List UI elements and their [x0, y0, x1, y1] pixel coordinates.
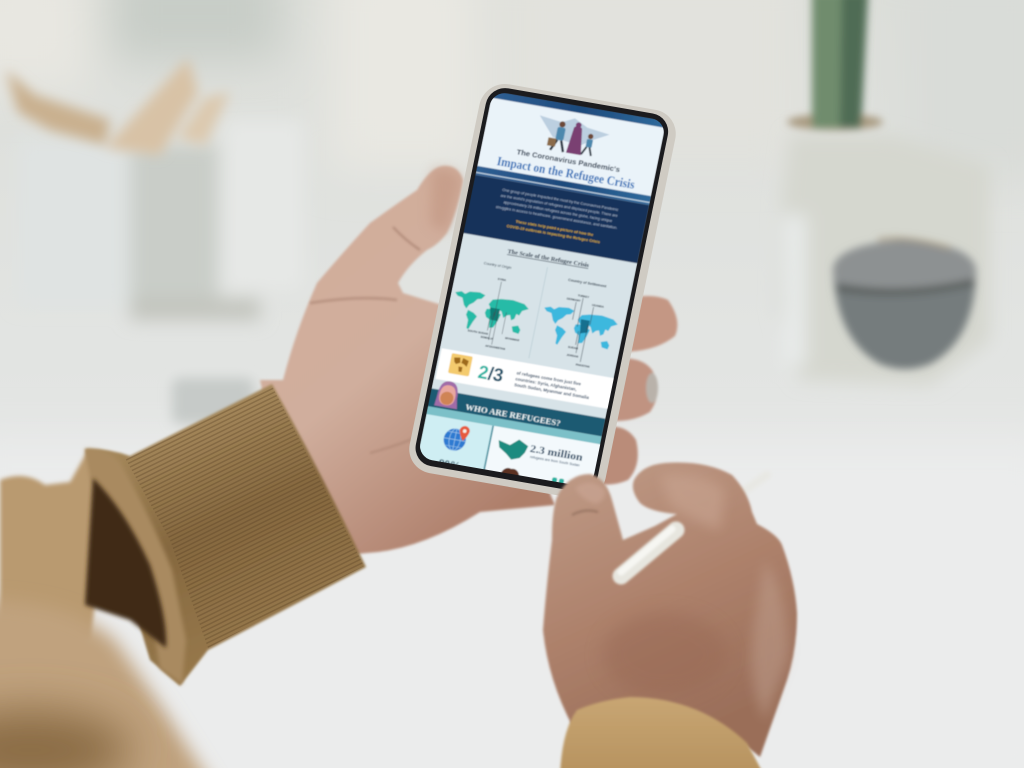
upper sleeve [0, 450, 110, 640]
palm crease [310, 298, 397, 303]
title line 1: The Coronavirus Pandemic's [516, 147, 621, 174]
infographic header [496, 115, 635, 190]
map: settlement [544, 294, 618, 368]
map: origin [455, 278, 529, 350]
map: origin: SOMALIA [480, 335, 494, 341]
palm and thumb [260, 166, 555, 560]
panel: 90 percent [420, 414, 492, 470]
thumb joint crease [393, 227, 420, 250]
title line 2: Impact on the Refugee Crisis [496, 154, 636, 192]
back of hand rim light [752, 560, 788, 720]
index finger highlight [660, 474, 725, 530]
yellow callout: These stats help paint a picture of how the [515, 219, 595, 237]
back of hand shadow [603, 613, 727, 697]
sleeve opening shadow [85, 478, 166, 648]
map: origin: MYANMAR [505, 336, 520, 342]
gray object on table [172, 378, 254, 424]
intro text: approximately 26 million refugees across the globe, facing unique [503, 200, 613, 223]
stat text: South Sudan, Myanmar and Somalia [514, 382, 590, 400]
icon: woman in hijab [434, 380, 462, 409]
cuff lip [85, 449, 186, 684]
panel: south sudan [484, 426, 600, 484]
left map heading: Country of Origin [483, 261, 512, 270]
heading: WHO ARE REFUGEES? [465, 402, 562, 428]
icon: teal shapes [551, 476, 565, 484]
heading: The Scale of the Refugee Crisis [507, 248, 590, 269]
right hand [543, 462, 797, 768]
teal band: who are refugees [426, 379, 608, 444]
finger 3 [590, 426, 638, 485]
thumb nail [575, 482, 605, 504]
gray cup [833, 239, 976, 369]
ribbed cuff [85, 384, 366, 686]
right map heading: Country of Settlement [568, 278, 607, 289]
finger 1 [620, 296, 677, 352]
phone screen [416, 91, 669, 496]
stat text: of refugees come from just five [516, 371, 582, 387]
stat caption: refugees are from South Sudan [530, 455, 580, 467]
intro text: struggles in access to healthcare, government assistance, and sanitation. [495, 205, 618, 230]
glass vase [778, 135, 990, 385]
sweater sleeve [0, 384, 366, 768]
icon: family hair [500, 467, 520, 476]
map: settlement: UGANDA [592, 303, 604, 309]
map: origin: AFGHANISTAN [485, 344, 506, 351]
finger 2 [602, 358, 658, 421]
percentage: 90% [437, 458, 462, 473]
stat number: 2.3 million [529, 443, 584, 464]
map: settlement: JORDAN [566, 353, 579, 359]
map: settlement: PAKISTAN [575, 362, 590, 369]
pen [621, 529, 676, 576]
map: settlement: SUDAN [568, 345, 578, 350]
top blue bar [491, 91, 667, 128]
panel: scale of the refugee crisis [431, 233, 637, 420]
intro text: are the world's population of refugees and displaced people. There are [500, 194, 618, 218]
divider [482, 426, 494, 475]
icon: South Sudan map [498, 439, 529, 460]
phone body [405, 80, 680, 503]
phone [405, 80, 680, 503]
intro text: One group of people impacted the most by the Coronavirus Pandemic [502, 188, 619, 212]
intro text [495, 187, 622, 230]
blue band [475, 166, 651, 205]
stat box: two thirds [435, 348, 616, 409]
right sleeve [560, 697, 764, 768]
yellow callout: COVID-19 outbreak is impacting the Refugee Crisis [506, 223, 601, 245]
map: settlement: TURKEY [578, 293, 590, 299]
stat text [514, 371, 592, 400]
big fraction: 2/3 [476, 362, 505, 386]
thumb joint crease [572, 511, 598, 515]
navy intro panel [463, 175, 649, 263]
pencils [6, 58, 230, 155]
thumb tip shade [430, 169, 462, 232]
phone bezel [412, 85, 672, 495]
map: settlement: GERMANY [566, 296, 581, 303]
map: origin: SYRIA [497, 277, 507, 282]
icon: map on yellow [448, 353, 473, 376]
illustration: refugee family [540, 115, 609, 157]
hand body [543, 462, 797, 757]
foreground blurred shoulder [0, 600, 215, 768]
map: origin: SOUTH SUDAN [467, 328, 488, 336]
pen top [744, 475, 767, 491]
icon: globe with pin [443, 425, 470, 452]
white pencil cup [18, 120, 304, 320]
stat text: countries: Syria, Afghanistan, [515, 376, 577, 392]
cactus plant [787, 0, 883, 130]
left hand [260, 166, 677, 560]
